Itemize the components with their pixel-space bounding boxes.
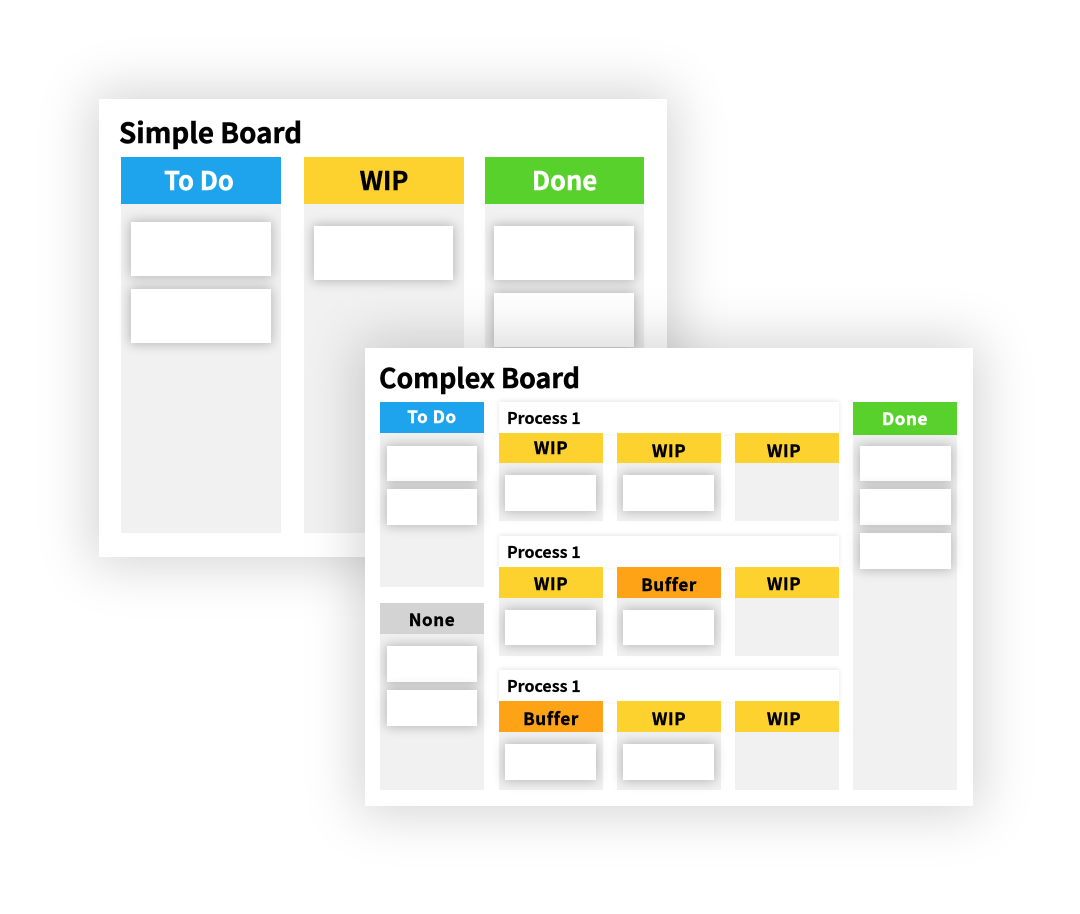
column: wip	[617, 433, 721, 521]
column: to do	[121, 157, 281, 533]
process label strip	[499, 402, 839, 434]
header: to do: To Do	[164, 161, 234, 198]
header: to do	[121, 157, 281, 204]
column: buffer	[499, 701, 603, 790]
column: wip	[617, 701, 721, 790]
column: wip	[735, 567, 839, 656]
column: wip	[499, 433, 603, 521]
panel: simple board	[99, 99, 667, 557]
header	[617, 433, 721, 463]
header	[735, 567, 839, 598]
process row 2	[498, 534, 840, 656]
header: none: None	[409, 606, 455, 631]
header: WIP	[767, 437, 801, 462]
header	[617, 701, 721, 732]
card	[387, 489, 477, 525]
column: buffer	[617, 567, 721, 656]
process label: Process 1	[507, 405, 581, 429]
process row 3	[498, 668, 840, 790]
card	[494, 293, 634, 347]
card	[494, 226, 634, 280]
heading: simple board: Simple Board	[119, 111, 302, 151]
column: wip	[735, 701, 839, 790]
card	[505, 475, 596, 511]
column: to do	[380, 402, 484, 587]
card	[387, 446, 477, 481]
header: Buffer	[523, 705, 579, 730]
card	[314, 226, 453, 280]
header: done: Done	[532, 161, 597, 198]
header: WIP	[652, 705, 686, 730]
header: to do	[380, 402, 484, 433]
header	[499, 567, 603, 598]
header	[735, 433, 839, 463]
process label strip	[499, 536, 839, 568]
header: done: Done	[882, 405, 928, 430]
card	[505, 610, 596, 645]
column: wip	[735, 433, 839, 521]
header: wip: WIP	[360, 161, 408, 198]
card	[623, 475, 714, 511]
card	[131, 289, 271, 343]
header: WIP	[534, 570, 568, 595]
card	[387, 690, 477, 726]
header: done	[485, 157, 644, 204]
column: done	[853, 402, 957, 790]
card	[387, 646, 477, 682]
process label: Process 1	[507, 539, 581, 563]
panel: complex board	[365, 348, 973, 806]
process row 1	[498, 400, 840, 521]
header: WIP	[767, 705, 801, 730]
card	[505, 744, 596, 780]
header	[735, 701, 839, 732]
process label strip	[499, 670, 839, 702]
header	[499, 433, 603, 463]
column: none	[380, 603, 484, 790]
card	[860, 446, 951, 481]
column: done	[485, 157, 644, 533]
card	[131, 222, 271, 276]
card	[623, 744, 714, 780]
column: wip	[499, 567, 603, 656]
column: wip	[304, 157, 464, 533]
card	[860, 533, 951, 569]
header: to do: To Do	[407, 403, 457, 428]
header: WIP	[767, 570, 801, 595]
card	[623, 610, 714, 645]
process label: Process 1	[507, 673, 581, 697]
heading: complex board: Complex Board	[379, 357, 580, 396]
header: wip	[304, 157, 464, 204]
header: done	[853, 402, 957, 435]
header: WIP	[534, 434, 568, 459]
header: none	[380, 603, 484, 634]
header: Buffer	[641, 571, 697, 596]
header	[499, 701, 603, 732]
card	[860, 489, 951, 525]
header	[617, 567, 721, 598]
header: WIP	[652, 437, 686, 462]
